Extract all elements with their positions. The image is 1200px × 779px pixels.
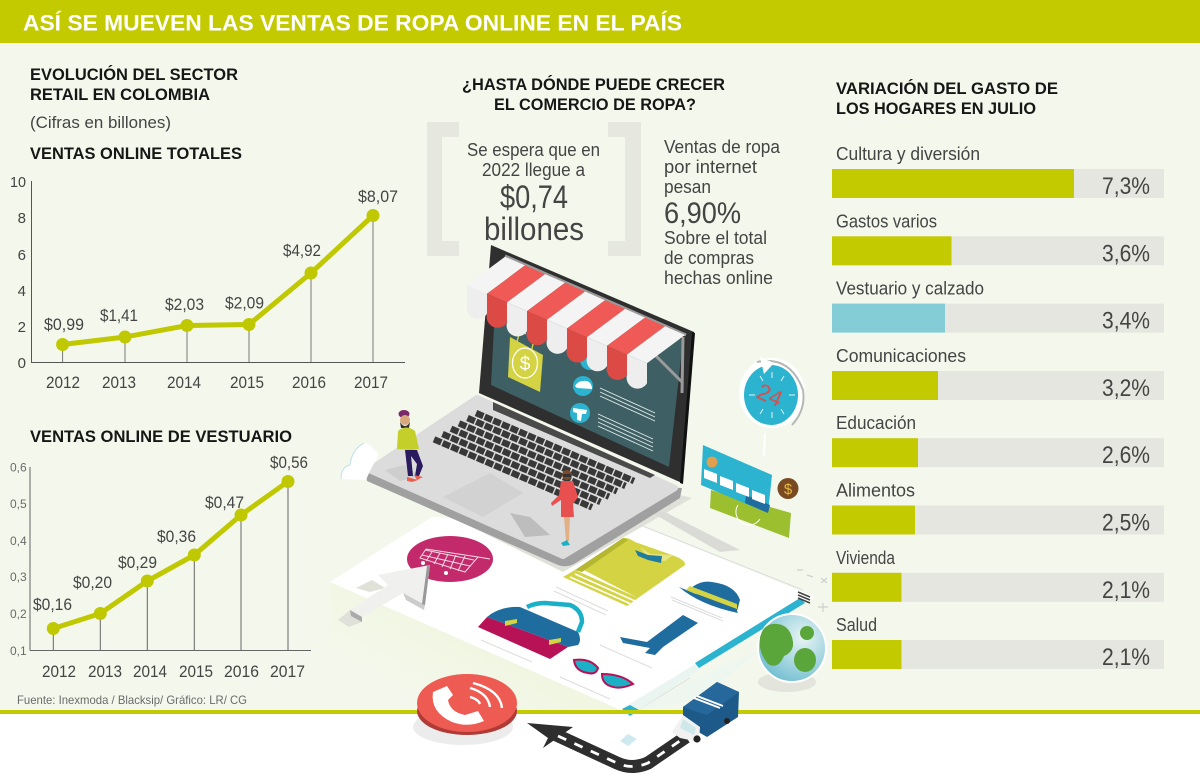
icon: shopping bag on screen: $ — [520, 354, 531, 375]
figure: woman — [551, 470, 578, 546]
right section heading — [836, 79, 1058, 118]
browser window controls — [797, 570, 828, 612]
illustration: browser page with products — [330, 517, 828, 746]
icon: cursor arrow — [338, 565, 430, 627]
bar: educacion — [832, 413, 1164, 469]
icon: globe — [758, 614, 826, 692]
line chart: ventas online de vestuario: 0,3 — [10, 570, 27, 584]
icon: credit cards and coin — [701, 445, 798, 538]
line chart: ventas online totales: $0,99 — [44, 315, 84, 334]
figure: man — [385, 410, 423, 482]
bracket callout: 2022 forecast: $0,74 — [500, 179, 568, 215]
line chart: ventas online de vestuario: $0,47 — [205, 493, 244, 512]
line chart: ventas online totales: 4 — [18, 283, 26, 300]
laptop base — [365, 398, 682, 566]
line chart: ventas online de vestuario: $0,36 — [157, 527, 196, 546]
line chart: ventas online totales: 10 — [10, 174, 26, 191]
line chart: ventas online de vestuario: $0,56 — [270, 453, 308, 472]
left section heading: EVOLUCIÓN DEL SECTOR — [30, 65, 238, 84]
laptop trackpad — [443, 473, 523, 517]
left section heading: RETAIL EN COLOMBIA — [30, 85, 210, 104]
bar: vivienda: Vivienda — [836, 548, 896, 568]
line chart: ventas online totales: VENTAS ONLINE TOTALES — [30, 144, 242, 163]
line chart: ventas online de vestuario: $0,16 — [33, 595, 72, 614]
text block: share of online purchases: 6,90% — [664, 197, 741, 230]
line chart: ventas online de vestuario: 0,4 — [10, 534, 27, 548]
awning — [467, 256, 686, 393]
arrow: delivery road — [527, 723, 686, 766]
bar: educacion: Educación — [836, 413, 916, 433]
line chart: ventas online totales — [10, 144, 405, 392]
bracket callout: 2022 forecast: Se espera que en — [467, 140, 600, 160]
line chart: ventas online de vestuario: 2017 — [270, 662, 305, 681]
bar: cultura — [832, 144, 1164, 200]
line chart: ventas online totales: 2012 — [46, 373, 80, 392]
title banner — [0, 0, 1200, 43]
bar: salud: Salud — [836, 615, 877, 635]
text block: share of online purchases: de compras — [664, 248, 754, 268]
line chart: ventas online de vestuario: VENTAS ONLINE DE VESTUARIO — [30, 427, 292, 446]
icon: shopping bag on screen — [508, 332, 543, 392]
green divider line — [0, 710, 1200, 714]
bar: educacion: 2,6% — [1102, 442, 1150, 469]
line chart: ventas online totales: 2017 — [354, 373, 388, 392]
line chart: ventas online de vestuario — [10, 427, 311, 681]
product: boot — [620, 615, 698, 655]
bar: alimentos: Alimentos — [836, 480, 915, 500]
center heading: ¿HASTA DÓNDE PUEDE CRECER — [462, 75, 725, 94]
line chart: ventas online totales: $1,41 — [100, 306, 138, 325]
icon: credit cards and coin: $ — [784, 481, 793, 498]
line chart: ventas online de vestuario: 0,6 — [10, 461, 27, 475]
source note: Fuente: Inexmoda / Blacksip/ Gráfico: LR/ CG — [17, 693, 247, 707]
line chart: ventas online totales: 2 — [18, 319, 26, 336]
text block: share of online purchases: Ventas de ropa — [664, 137, 781, 157]
line chart: ventas online totales: 0 — [18, 355, 26, 372]
center heading: EL COMERCIO DE ROPA? — [494, 95, 696, 114]
bar: alimentos: 2,5% — [1102, 510, 1150, 536]
line chart: ventas online de vestuario: 2012 — [42, 662, 76, 681]
bar: comunicaciones: 3,2% — [1102, 375, 1150, 402]
line chart: ventas online totales: $4,92 — [283, 241, 321, 260]
icon: 24-hour clock: 24 — [753, 378, 787, 412]
icon: phone button — [413, 674, 517, 745]
line chart: ventas online de vestuario: 2013 — [88, 662, 122, 681]
bar: vestuario: Vestuario y calzado — [836, 279, 984, 299]
product: bag — [478, 603, 582, 659]
bar: salud: 2,1% — [1102, 644, 1150, 671]
bar: comunicaciones — [832, 346, 1164, 402]
bar: vestuario: 3,4% — [1102, 308, 1150, 335]
product: sunglasses — [574, 660, 633, 688]
line chart: ventas online totales: $2,09 — [225, 294, 264, 312]
bracket callout: 2022 forecast: billones — [484, 211, 584, 247]
text block: share of online purchases — [664, 137, 781, 288]
icon: 24-hour clock — [739, 357, 805, 456]
bar: salud — [832, 615, 1164, 671]
bracket callout: 2022 forecast — [427, 122, 641, 256]
bar: vivienda: 2,1% — [1102, 577, 1150, 604]
line chart: ventas online de vestuario: 2015 — [179, 662, 213, 681]
right section heading: VARIACIÓN DEL GASTO DE — [836, 79, 1058, 98]
bar: cultura: 7,3% — [1102, 173, 1150, 200]
right section heading: LOS HOGARES EN JULIO — [836, 99, 1036, 118]
center heading — [462, 75, 725, 114]
title banner: ASÍ SE MUEVEN LAS VENTAS DE ROPA ONLINE EN EL PAÍS — [23, 10, 682, 36]
bracket callout: 2022 forecast: 2022 llegue a — [482, 160, 586, 180]
laptop keyboard — [434, 413, 634, 507]
laptop screen — [479, 245, 695, 484]
line chart: ventas online totales: $2,03 — [165, 295, 204, 314]
text block: share of online purchases: pesan — [664, 177, 711, 197]
icon: shopping cart badge — [407, 536, 493, 582]
line chart: ventas online totales: 6 — [18, 247, 26, 264]
product: shirt — [563, 538, 685, 606]
bar: alimentos — [832, 480, 1164, 536]
bar chart: household spending — [832, 144, 1164, 671]
product: hat — [679, 582, 740, 613]
left section heading: (Cifras en billones) — [30, 113, 171, 132]
bar: vivienda — [832, 548, 1164, 604]
line chart: ventas online totales: 2013 — [102, 373, 136, 392]
bar: gastos varios: 3,6% — [1102, 240, 1150, 267]
left section heading — [30, 65, 238, 132]
line chart: ventas online de vestuario: 2016 — [224, 662, 259, 681]
line chart: ventas online totales: 2015 — [230, 373, 264, 392]
product listing lines — [481, 587, 723, 699]
icon: delivery truck — [672, 682, 739, 743]
line chart: ventas online de vestuario: 0,5 — [10, 497, 27, 511]
bar: cultura: Cultura y diversión — [836, 144, 980, 164]
line chart: ventas online de vestuario: 0,2 — [10, 607, 27, 621]
icon: cloud — [341, 443, 378, 480]
line chart: ventas online de vestuario: 2014 — [133, 662, 167, 681]
text block: share of online purchases: por internet — [664, 157, 757, 177]
illustration: laptop — [341, 245, 826, 766]
line chart: ventas online totales: $8,07 — [358, 187, 398, 206]
text block: share of online purchases: Sobre el total — [664, 228, 767, 248]
text block: share of online purchases: hechas online — [664, 268, 773, 288]
line chart: ventas online totales: 2016 — [292, 373, 326, 392]
line chart: ventas online de vestuario: $0,20 — [73, 573, 112, 592]
line chart: ventas online totales: 2014 — [167, 373, 201, 392]
line chart: ventas online totales: 8 — [18, 210, 26, 227]
line chart: ventas online de vestuario: 0,1 — [10, 644, 27, 658]
bar: vestuario — [832, 279, 1164, 335]
line chart: ventas online de vestuario: $0,29 — [118, 553, 157, 572]
bar: gastos varios — [832, 211, 1164, 267]
bar: comunicaciones: Comunicaciones — [836, 346, 966, 366]
bar: gastos varios: Gastos varios — [836, 211, 937, 231]
